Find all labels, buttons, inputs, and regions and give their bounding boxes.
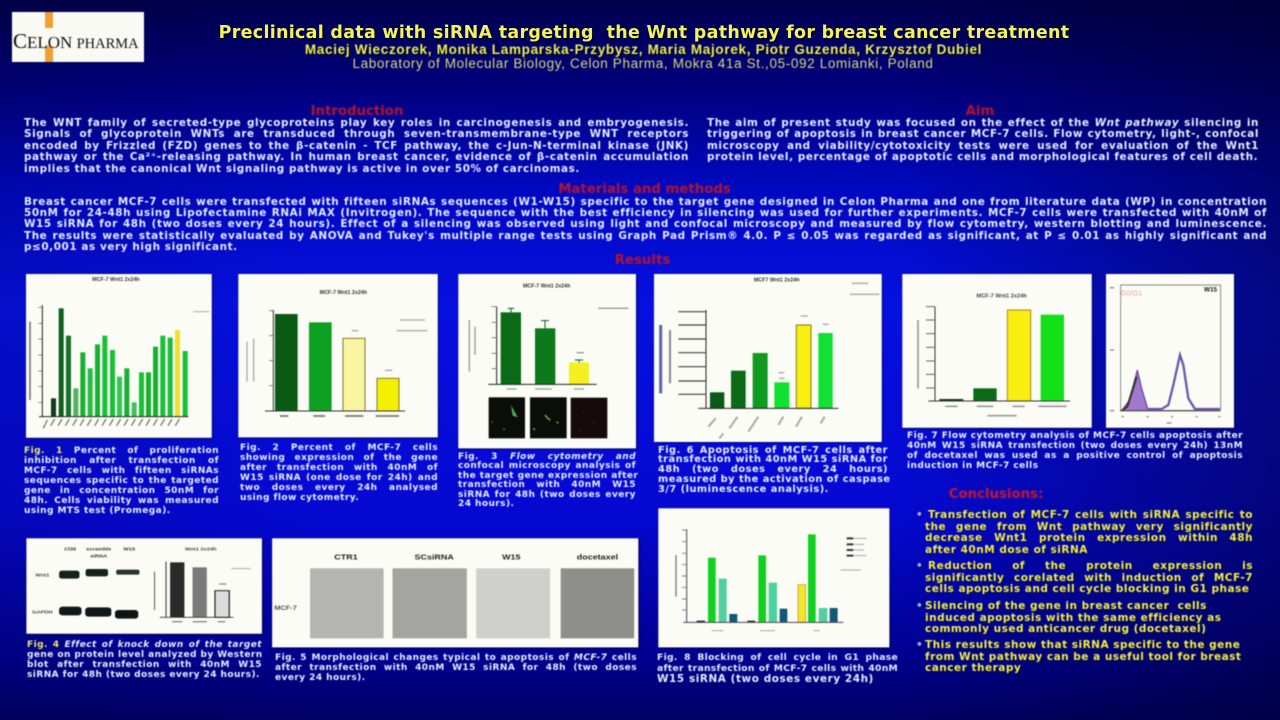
figure 8: cell cycle chart <box>658 508 889 647</box>
caption: fig 2: two doses every 24h analysed <box>240 483 438 493</box>
text: introduction: The WNT family of secreted-type glycoproteins play key roles in carcinogenesis and embryogenesis. <box>24 116 689 128</box>
caption: fig 1: Fig. 1 Percent of proliferation <box>24 446 219 456</box>
figure 6: caspase activity chart <box>654 274 882 442</box>
caption: fig 8: after transfection of MCF-7 cells with 40nM <box>657 663 898 674</box>
figure 5: cell morphology micrographs: W15 <box>502 553 521 561</box>
figure 6: caspase activity chart: MCF7 Wnt1 2x24h <box>754 278 799 284</box>
conclusion 3 <box>916 600 1222 636</box>
figure 7b: flow cytometry histogram <box>1106 274 1234 428</box>
conclusion 2: cells apoptosis and cell cycle blocking in G1 phase <box>925 583 1249 595</box>
conclusion 4: This results show that siRNA specific to the gene <box>925 639 1240 651</box>
text: introduction: Signals of glycoprotein WNTs are transduced through seven-transmembrane-type WNT receptors <box>24 128 689 140</box>
caption: fig 3: confocal microscopy analysis of <box>458 461 636 471</box>
conclusion 2 <box>916 560 1254 596</box>
conclusion 1: Transfection of MCF-7 cells with siRNA specific to <box>928 509 1253 521</box>
figure 3: flow cytometry and confocal microscopy <box>458 274 636 448</box>
caption: fig 3: Fig. 3 Flow cytometry and <box>458 452 636 462</box>
figure 7: apoptosis bar chart <box>902 274 1092 428</box>
text: introduction <box>23 116 689 175</box>
figure 4: western blot and densitometry: siRNA <box>90 554 107 559</box>
caption: fig 7: induction in MCF-7 cells <box>907 461 1039 471</box>
caption: fig 8 <box>656 652 898 685</box>
figure 5: cell morphology micrographs: docetaxel <box>577 553 618 561</box>
caption: fig 3: the target gene expression after <box>458 471 638 481</box>
heading: aim: Aim <box>966 104 994 119</box>
caption: fig 6 <box>657 444 891 495</box>
caption: fig 1: 48h. Cells viability was measured <box>24 496 219 506</box>
caption: fig 1: sequences specific to the targeted <box>24 476 219 486</box>
text: introduction: implies that the canonical Wnt signaling pathway is active in over 50% of carcinomas. <box>24 163 580 175</box>
figure 4: western blot and densitometry: Wnt1 2x24h <box>185 547 217 552</box>
caption: fig 2: after transfection with 40nM of <box>240 463 438 473</box>
figure 4: western blot and densitometry <box>26 538 262 634</box>
caption: fig 5 <box>274 652 637 683</box>
affiliation: Laboratory of Molecular Biology, Celon Pharma, Mokra 41a St.,05-092 Lomianki, Poland <box>352 56 934 71</box>
conclusion 1 <box>916 509 1254 556</box>
figure 1: proliferation inhibition chart <box>26 274 212 438</box>
figure 2: gene expression chart: MCF-7 Wnt1 2x24h <box>320 290 367 296</box>
figure 7: apoptosis bar chart: MCF-7 Wnt1 2x24h <box>977 294 1027 300</box>
logo: CELON PHARMA <box>13 29 139 53</box>
caption: fig 8: W15 siRNA (two doses every 24h) <box>657 673 874 685</box>
caption: fig 3: transfection with 40nM W15 <box>458 480 636 490</box>
figure 5: cell morphology micrographs: MCF-7 <box>274 606 297 612</box>
caption: fig 6: measured by the activation of caspase <box>658 474 891 485</box>
conclusion 3: induced apoptosis with the same efficiency as <box>925 612 1222 624</box>
conclusion 4 <box>916 639 1242 674</box>
text: introduction: pathway or the Ca²⁺-releasing pathway. In human breast cancer, evidence of β-catenin accumulation <box>24 151 689 163</box>
caption: fig 2: W15 siRNA (one dose for 24h) and <box>240 473 438 483</box>
caption: fig 4 <box>26 639 263 680</box>
conclusion 4: • <box>916 639 923 651</box>
caption: fig 5: every 24 hours). <box>275 673 366 683</box>
figure 7b: flow cytometry histogram: W15 <box>1204 287 1217 294</box>
figure 4: western blot and densitometry: GAPDH <box>32 610 53 615</box>
title: Preclinical data with siRNA targeting the Wnt pathway for breast cancer treatment <box>219 23 1069 43</box>
conclusion 4: from Wnt pathway can be a useful tool for breast <box>925 650 1241 662</box>
text: materials and methods: 50nM for 24-48h using Lipofectamine RNAi MAX (Invitrogen). The sequence with the best efficiency in silencing was used for further experiments. MCF-7 cells were transfected with 40nM of <box>24 207 1267 219</box>
text: materials and methods <box>23 196 1268 253</box>
caption: fig 1: gene in concentration 50nM for <box>24 486 219 496</box>
heading: conclusions: Conclusions: <box>949 487 1043 502</box>
caption: fig 7: Fig. 7 Flow cytometry analysis of MCF-7 cells apoptosis after <box>907 431 1243 441</box>
caption: fig 2: using flow cytometry. <box>240 493 359 503</box>
figure 4: western blot and densitometry: Wnt1 <box>35 573 49 578</box>
figure 4: western blot and densitometry: Cl39 <box>64 547 76 552</box>
conclusion 1: decrease Wnt1 protein expression within 48h <box>925 532 1253 544</box>
logo <box>12 12 144 62</box>
caption: fig 1: using MTS test (Promega). <box>24 506 171 516</box>
text: aim: microscopy and viability/cytotoxicity tests were used for evaluation of the Wnt1 <box>707 140 1259 152</box>
caption: fig 4: blot after transfection with 40nM W15 <box>27 660 262 670</box>
figure 3: flow cytometry and confocal microscopy: MCF-7 Wnt1 2x24h <box>523 284 570 290</box>
conclusion 2: • <box>916 560 923 572</box>
caption: fig 7: 40nM W15 siRNA transfection (two doses every 24h) 13nM <box>907 441 1243 451</box>
caption: fig 3: siRNA for 48h (two doses every <box>458 490 636 500</box>
caption: fig 6: 48h (two doses every 24 hours) <box>658 464 888 475</box>
caption: fig 6: Fig. 6 Apoptosis of MCF-7 cells after <box>658 444 888 456</box>
figure 2: gene expression chart <box>238 274 438 437</box>
figure 4: western blot and densitometry: W15 <box>123 547 135 552</box>
caption: fig 4: siRNA for 48h (two doses every 24 hours). <box>27 670 260 680</box>
heading: results: Results <box>615 253 670 268</box>
figure 5: cell morphology micrographs <box>272 538 638 647</box>
caption: fig 2: Fig. 2 Percent of MCF-7 cells <box>240 443 438 453</box>
caption: fig 3: 24 hours). <box>458 499 514 509</box>
text: materials and methods: p≤0,001 as very high significant. <box>24 241 238 253</box>
caption: fig 1: MCF-7 cells with fifteen siRNAs <box>24 466 219 476</box>
conclusion 1: the gene from Wnt pathway very significantly <box>925 520 1253 532</box>
text: materials and methods: Breast cancer MCF-7 cells were transfected with fifteen siRNAs sequences (W1-W15) specific to the target gene designed in Celon Pharma and one from literature data (WP) in concentration <box>24 196 1267 208</box>
text: aim <box>706 116 1259 163</box>
conclusion 3: Silencing of the gene in breast cancer cells <box>925 600 1207 612</box>
caption: fig 6: 3/7 (luminescence analysis). <box>658 484 829 495</box>
caption: fig 7: of docetaxel was used as a positive control of apoptosis <box>907 451 1243 461</box>
caption: fig 7 <box>906 430 1244 471</box>
conclusion 1: • <box>916 509 923 521</box>
text: aim: triggering of apoptosis in breast cancer MCF-7 cells. Flow cytometry, light-, confocal <box>707 128 1259 140</box>
figure 7b: flow cytometry histogram: G0/G1 <box>1121 289 1142 298</box>
caption: fig 6: transfection with 40nM W15 siRNA for <box>658 454 888 465</box>
caption: fig 4: gene on protein level analyzed by Western <box>27 650 263 660</box>
caption: fig 1: inhibition after transfection of <box>24 456 219 466</box>
text: introduction: encoded by Frizzled (FZD) genes to the β-catenin - TCF pathway, the c-Jun-N-terminal kinase (JNK) <box>24 140 689 152</box>
authors: Maciej Wieczorek, Monika Lamparska-Przybysz, Maria Majorek, Piotr Guzenda, Krzysztof Dubiel <box>305 42 982 57</box>
caption: fig 5: Fig. 5 Morphological changes typical to apoptosis of MCF-7 cells <box>275 653 637 663</box>
figure 4: western blot and densitometry: scramble <box>86 547 111 552</box>
conclusion 3: commonly used anticancer drug (docetaxel) <box>925 623 1206 635</box>
conclusion 4: cancer therapy <box>925 662 1021 674</box>
conclusion 2: significantly corelated with induction of MCF-7 <box>925 572 1253 584</box>
caption: fig 2: showing expression of the gene <box>240 453 438 463</box>
text: aim: protein level, percentage of apoptotic cells and morphological features of cell death. <box>707 151 1258 163</box>
caption: fig 4: Fig. 4 Effect of knock down of the target <box>27 640 262 650</box>
figure 5: cell morphology micrographs: SCsiRNA <box>414 553 454 561</box>
figure 1: proliferation inhibition chart: MCF-7 Wnt1 2x24h <box>92 277 140 283</box>
text: materials and methods: W15 siRNA for 48h (two doses every 24 hours). Effect of a silencing was observed using light and confocal microscopy and measured by flow cytometry, western blotting and luminescence. <box>24 218 1267 230</box>
text: materials and methods: The results were statistically evaluated by ANOVA and Tukey's multiple range tests using Graph Pad Prism® 4.0. P ≤ 0.05 was regarded as significant, at P ≤ 0.01 as highly significant and <box>24 230 1267 242</box>
caption: fig 2 <box>239 442 438 503</box>
conclusion 3: • <box>916 600 923 612</box>
heading: materials and methods: Materials and methods <box>558 182 731 197</box>
heading: introduction: Introduction <box>311 104 403 119</box>
text: aim: The aim of present study was focused on the effect of the Wnt pathway silencing in <box>707 116 1259 128</box>
caption: fig 8: Fig. 8 Blocking of cell cycle in G1 phase <box>657 652 898 663</box>
conclusions list <box>916 509 1254 674</box>
conclusion 2: Reduction of the protein expression is <box>928 560 1253 572</box>
conclusion 1: after 40nM dose of siRNA <box>925 544 1088 556</box>
caption: fig 3 <box>457 451 638 509</box>
figure 5: cell morphology micrographs: CTR1 <box>334 553 358 561</box>
caption: fig 5: after transfection with 40nM W15 siRNA for 48h (two doses <box>275 663 637 673</box>
caption: fig 1 <box>24 445 220 516</box>
